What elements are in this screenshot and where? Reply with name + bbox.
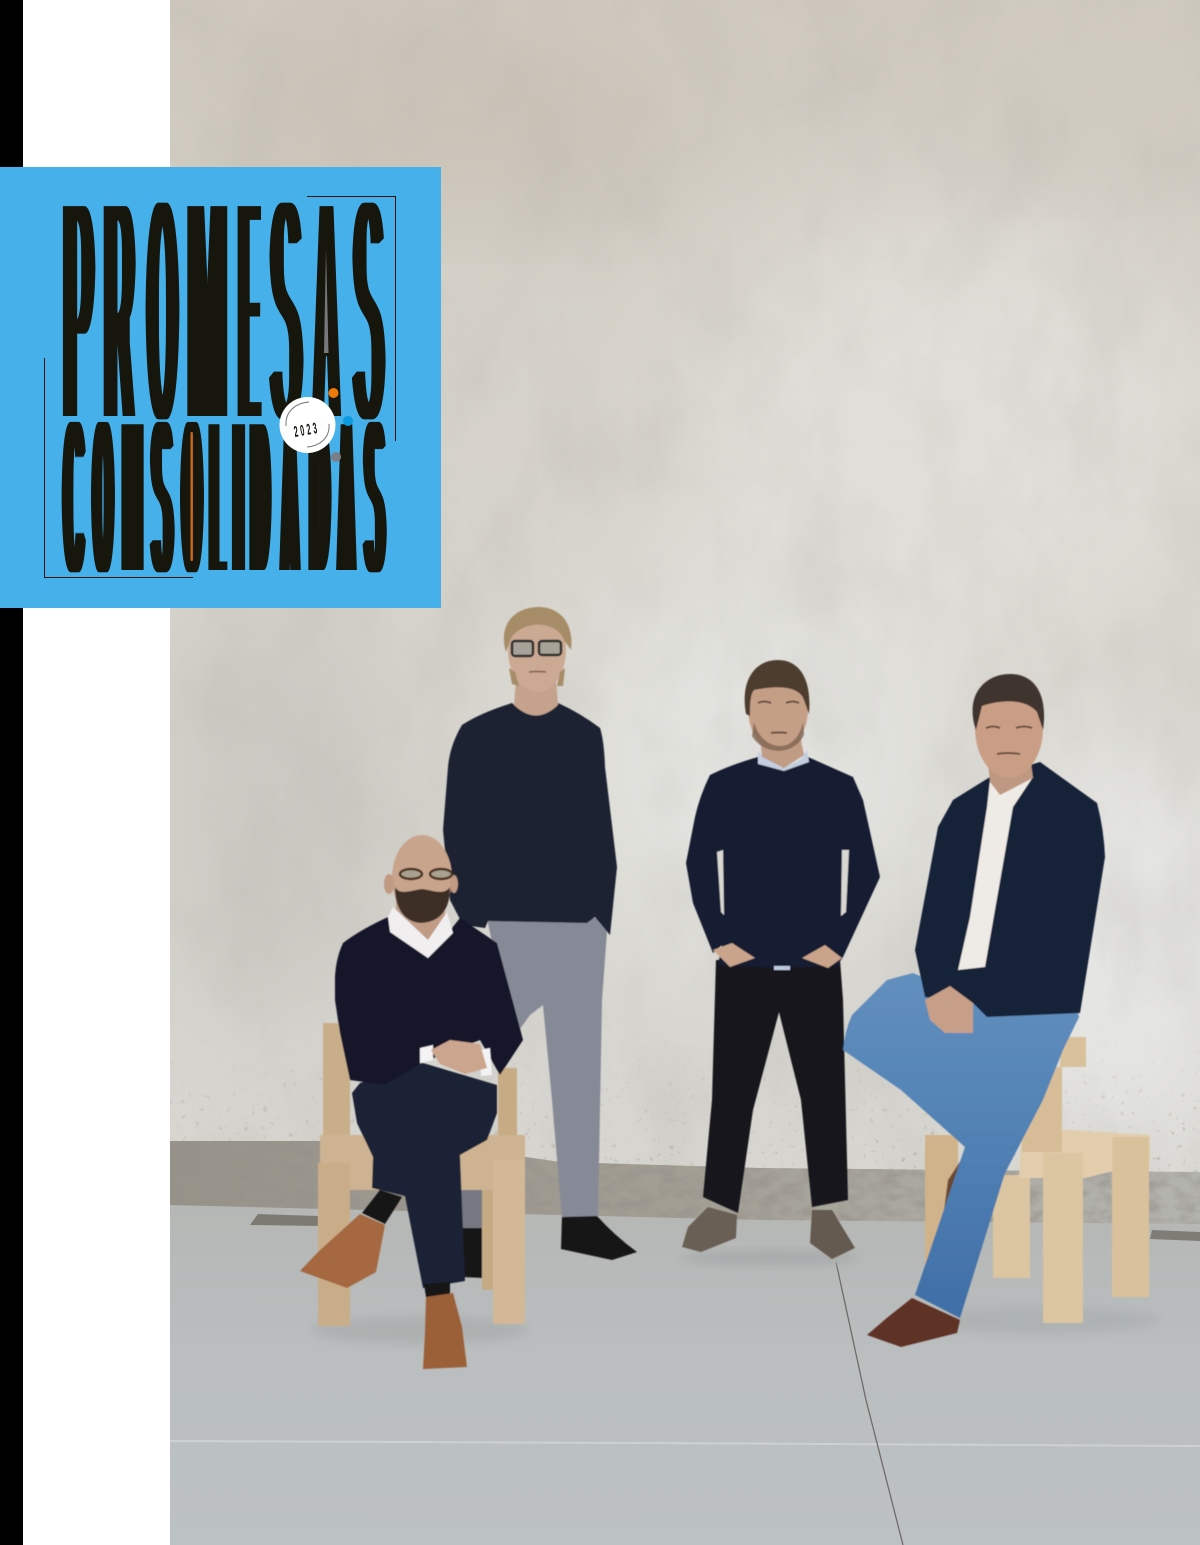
hands: [925, 986, 973, 1033]
jacket: [915, 762, 1105, 1017]
shoes: [561, 1216, 637, 1260]
neck: [988, 755, 1033, 795]
title word: CONSOLIDADAS: O: [183, 365, 201, 630]
floor crack: [836, 1262, 903, 1545]
title word: CONSOLIDADAS: C: [64, 365, 84, 630]
title word: CONSOLIDADAS: I: [234, 365, 244, 630]
grey counter sliver: [324, 248, 328, 353]
blue title panel: S: [270, 121, 302, 501]
title word: CONSOLIDADAS: [64, 365, 384, 630]
hands: [431, 1040, 487, 1074]
dot: orange: [328, 388, 338, 398]
floor seam: [170, 1441, 1200, 1446]
seat: [1019, 1127, 1150, 1178]
trousers: [487, 918, 608, 1218]
corner rule: bottom left: [44, 358, 193, 578]
neck: [514, 680, 558, 716]
collar: [388, 907, 453, 958]
mouth: [529, 670, 546, 673]
sweater: [686, 757, 880, 968]
floor shadows: [318, 1318, 522, 1343]
title word: CONSOLIDADAS: L: [211, 365, 224, 630]
neck: [760, 735, 804, 768]
eyes and mouth: [986, 726, 1032, 754]
left white column: [23, 0, 170, 1545]
title word: PROMESAS: O: [148, 121, 177, 501]
hands: [713, 943, 842, 968]
title word: CONSOLIDADAS: N: [124, 365, 141, 630]
chair: left, wooden: [318, 1023, 525, 1326]
shirt: [958, 777, 1033, 970]
front legs: [318, 1163, 350, 1326]
beard shade: [752, 722, 804, 751]
hair: [745, 660, 809, 716]
shoes: [682, 1207, 737, 1252]
wall speckle: [170, 1060, 1200, 1172]
person: seated man with bald head: [300, 835, 523, 1369]
head: [975, 678, 1043, 778]
blue title panel: D: [311, 365, 329, 630]
head: [392, 835, 452, 921]
right leg: [1112, 1137, 1149, 1297]
dot: grey: [331, 452, 341, 462]
trousers: [352, 1063, 497, 1288]
rear leg left: [925, 1135, 958, 1277]
title word: CONSOLIDADAS: S: [152, 365, 172, 630]
wall base band: [170, 1140, 1200, 1230]
shoe: [867, 1298, 960, 1347]
title word: PROMESAS: R: [105, 121, 134, 501]
blue title panel: A: [314, 121, 339, 501]
page composition: S: [365, 365, 384, 630]
dot: blue: [343, 416, 353, 426]
seat: [320, 1135, 525, 1190]
socks: [362, 1190, 450, 1297]
arm gaps: [717, 850, 849, 916]
concrete floor: [170, 1205, 1200, 1545]
badge year: 2023: [293, 419, 321, 441]
chair: right, wooden: [925, 1037, 1150, 1323]
person: standing man in black jeans: [682, 660, 880, 1259]
blue title panel: A: [339, 365, 354, 630]
boot: planted: [423, 1293, 467, 1369]
corner rule: top right: [307, 196, 396, 441]
cuffs: [420, 1045, 492, 1076]
rear leg middle: [993, 1175, 1030, 1278]
title word: PROMESAS: E: [240, 121, 259, 501]
orange counter sliver: [190, 432, 193, 561]
year badge: [280, 397, 336, 453]
glasses: [400, 869, 452, 879]
upper bar left: [950, 1053, 968, 1093]
title word: PROMESAS: P: [64, 121, 93, 501]
glasses: [512, 641, 561, 656]
beard: [395, 887, 450, 923]
shirt hem: [774, 966, 790, 970]
title word: CONSOLIDADAS: A: [282, 365, 298, 630]
person: seated man in jeans and blazer: [843, 674, 1105, 1347]
person: standing man with glasses: [443, 607, 637, 1278]
people and chairs: [300, 607, 1150, 1369]
floor vents: [250, 1214, 318, 1226]
sweater: [443, 703, 617, 935]
backrest: [1022, 1067, 1062, 1152]
hair: [504, 607, 571, 686]
badge arcs: [286, 402, 329, 447]
left black strip: [0, 0, 23, 1545]
boot: crossed leg: [300, 1214, 385, 1288]
face: [508, 608, 566, 692]
sweater: [335, 917, 523, 1085]
concrete wall: [150, 0, 1200, 1240]
page composition: S: [354, 121, 384, 501]
jeans: [843, 973, 1079, 1318]
title word: PROMESAS: M: [188, 121, 226, 501]
neck: [396, 900, 445, 945]
front leg: [1043, 1153, 1083, 1323]
collar: [758, 750, 809, 771]
rear leg: [482, 1188, 495, 1290]
blue title panel: [0, 121, 441, 630]
eyes and mouth: [758, 702, 799, 733]
rear shoe: [944, 1157, 963, 1210]
head: [748, 664, 808, 752]
title word: CONSOLIDADAS: D: [252, 365, 269, 630]
hair: [973, 674, 1044, 730]
backrest post: [323, 1023, 350, 1135]
jeans: [703, 960, 848, 1213]
title word: CONSOLIDADAS: O: [94, 365, 112, 630]
